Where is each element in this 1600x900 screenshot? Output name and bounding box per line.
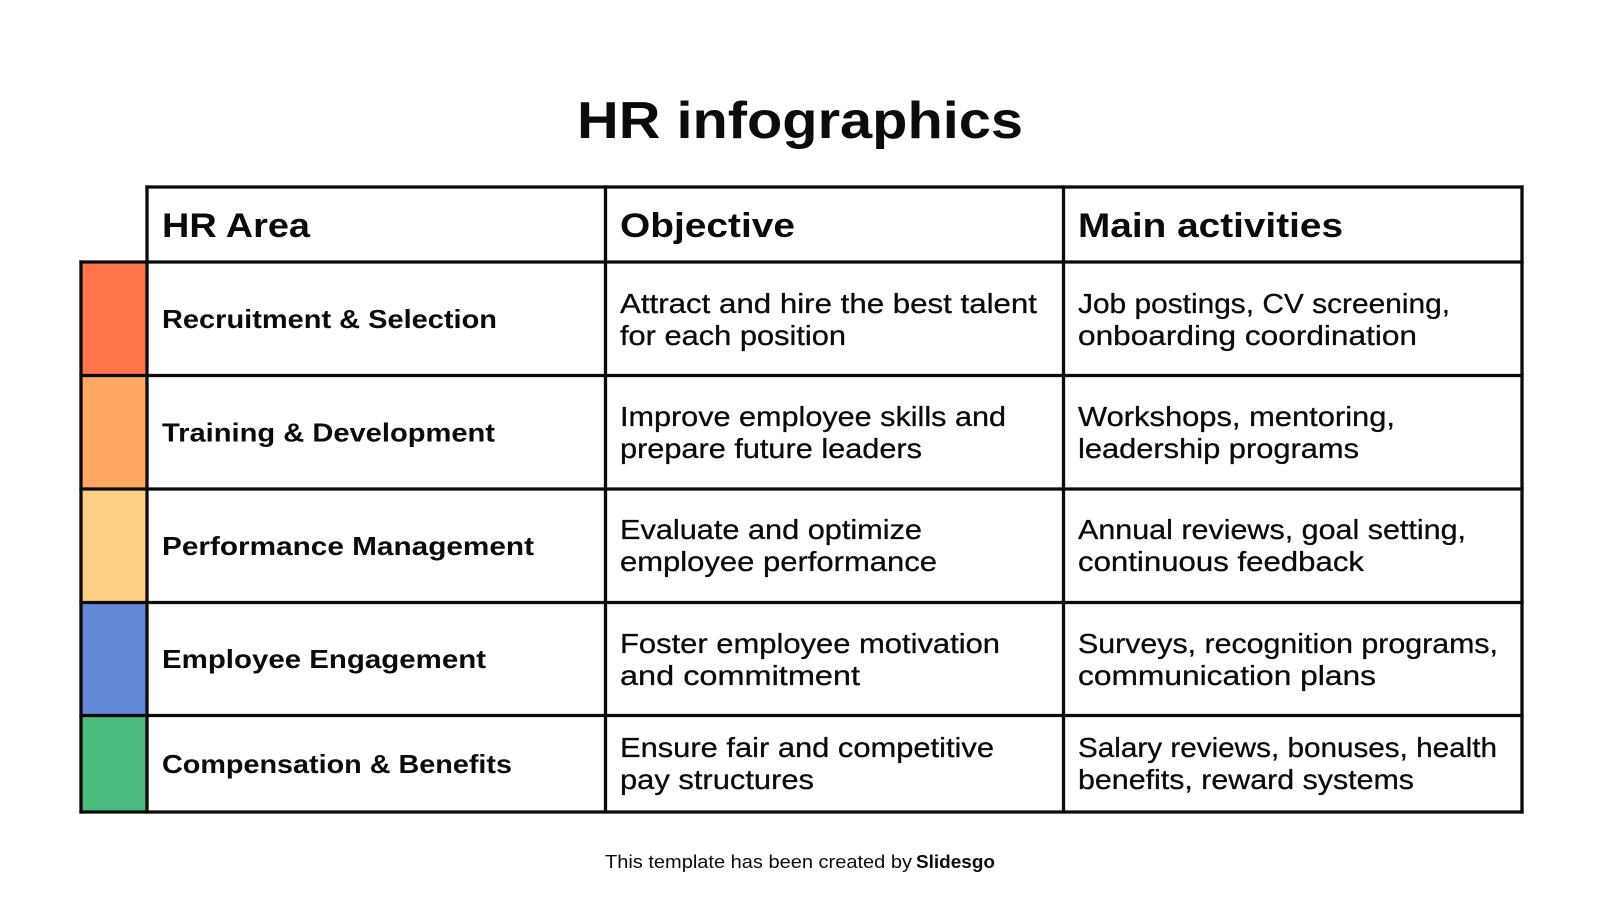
objective text: Foster employee motivation xyxy=(620,628,1000,659)
area label: Recruitment & Selection xyxy=(162,304,497,334)
area label: Training & Development xyxy=(162,418,495,448)
objective text xyxy=(620,401,1006,464)
activities text: Surveys, recognition programs, xyxy=(1078,628,1498,659)
color swatch: training xyxy=(81,375,147,489)
activities text: onboarding coordination xyxy=(1078,320,1417,351)
row: Employee Engagement xyxy=(162,628,1498,691)
activities text xyxy=(1078,514,1466,577)
table header row xyxy=(162,207,1343,245)
header: Main activities: Main activities xyxy=(1078,207,1343,245)
activities text: communication plans xyxy=(1078,660,1376,691)
title: HR infographics xyxy=(577,92,1023,150)
footer credit: Slidesgo xyxy=(916,852,995,872)
objective text: Ensure fair and competitive xyxy=(620,732,994,763)
objective text: Attract and hire the best talent xyxy=(620,288,1037,319)
color swatch: compensation xyxy=(81,715,147,812)
area label: Compensation & Benefits xyxy=(162,749,512,779)
activities text: continuous feedback xyxy=(1078,546,1365,577)
header: HR Area: HR Area xyxy=(162,207,311,245)
color swatch: engagement xyxy=(81,602,147,715)
objective text xyxy=(620,628,1000,691)
area label: Performance Management xyxy=(162,531,534,561)
activities text: Annual reviews, goal setting, xyxy=(1078,514,1466,545)
panel: HR table xyxy=(81,187,1522,812)
activities text: Salary reviews, bonuses, health xyxy=(1078,732,1497,763)
objective text: employee performance xyxy=(620,546,937,577)
row: Performance Management xyxy=(162,514,1466,577)
activities text: Job postings, CV screening, xyxy=(1078,288,1450,319)
activities text xyxy=(1078,732,1497,795)
row: Recruitment & Selection xyxy=(162,288,1450,351)
objective text: Evaluate and optimize xyxy=(620,514,922,545)
activities text xyxy=(1078,628,1498,691)
objective text: Improve employee skills and xyxy=(620,401,1006,432)
color swatch: recruitment xyxy=(81,262,147,375)
activities text: benefits, reward systems xyxy=(1078,764,1414,795)
row: Training & Development xyxy=(162,401,1395,464)
objective text: and commitment xyxy=(620,660,860,691)
color swatch: performance xyxy=(81,489,147,602)
activities text: leadership programs xyxy=(1078,433,1359,464)
activities text: Workshops, mentoring, xyxy=(1078,401,1395,432)
row: Compensation & Benefits xyxy=(162,732,1497,795)
footer credit: This template has been created by xyxy=(605,852,912,872)
color key column xyxy=(81,262,147,812)
objective text xyxy=(620,514,937,577)
objective text: pay structures xyxy=(620,764,814,795)
activities text xyxy=(1078,288,1450,351)
area label: Employee Engagement xyxy=(162,644,486,674)
objective text xyxy=(620,732,994,795)
activities text xyxy=(1078,401,1395,464)
objective text: for each position xyxy=(620,320,846,351)
objective text: prepare future leaders xyxy=(620,433,922,464)
objective text xyxy=(620,288,1037,351)
header: Objective: Objective xyxy=(620,207,795,245)
